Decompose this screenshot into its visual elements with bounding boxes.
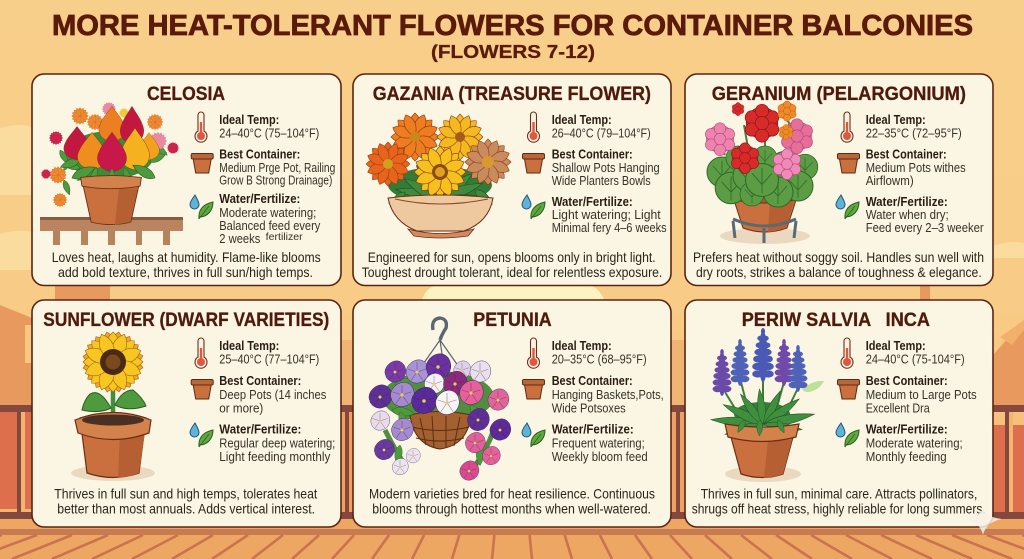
info: best container: [866, 148, 966, 188]
icon: pot: [838, 380, 860, 399]
description: [362, 249, 662, 280]
icon: water and leaf: [836, 195, 859, 219]
info: best container: [552, 148, 660, 188]
subtitle: (FLOWERS 7-12): [431, 42, 595, 62]
panel: gazania: [353, 74, 671, 286]
info: water and fertilize: Water/Fertilize:: [552, 195, 633, 209]
info: water and fertilize: Water when dry;: [866, 208, 949, 222]
description: [52, 249, 321, 280]
illustration: geranium on stand: [705, 101, 818, 244]
info: best container: Best Container:: [866, 374, 948, 388]
illustration: gazania in bowl: [359, 106, 518, 238]
description: Loves heat, laughs at humidity. Flame-like blooms: [52, 249, 321, 265]
info: best container: Shallow Pots Hanging: [552, 161, 660, 175]
info: ideal temp: 22–35°C (72–95°F): [866, 126, 962, 140]
info: ideal temp: Ideal Temp:: [552, 339, 612, 353]
description: Engineered for sun, opens blooms only in bright light.: [368, 249, 656, 265]
info: ideal temp: 24–40°C (75-104°F): [866, 352, 965, 366]
info: ideal temp: [552, 339, 647, 366]
icon: thermometer: [195, 112, 207, 142]
panel: geranium: [685, 74, 993, 286]
panel: salvia: [685, 300, 993, 527]
description: Thrives in full sun, minimal care. Attracts pollinators,: [701, 486, 977, 502]
icon: pot: [191, 380, 213, 399]
info: best container: or more): [219, 402, 263, 416]
info: water and fertilize: Light feeding monthly: [219, 450, 331, 464]
description: [369, 486, 655, 516]
icon: pot: [838, 154, 860, 173]
info: best container: Medium Pots withes: [866, 161, 966, 175]
info: water and fertilize: [552, 422, 648, 464]
info: ideal temp: Ideal Temp:: [219, 339, 279, 353]
icon: thermometer: [841, 112, 853, 142]
info: water and fertilize: 2 weeks: [219, 232, 260, 246]
icon: thermometer: [528, 112, 540, 142]
illustration: salvia in pot: [711, 328, 824, 482]
icon: thermometer: [195, 338, 207, 368]
description: [54, 486, 317, 516]
info: ideal temp: 26–40°C (79–104°F): [552, 126, 651, 140]
buildings: [0, 285, 1024, 406]
info: best container: Wide Potsoxes: [552, 402, 626, 416]
icon: water and leaf: [190, 423, 213, 447]
panel: celosia: [32, 74, 341, 286]
icon: thermometer: [841, 338, 853, 368]
sparkle: [966, 508, 1002, 535]
info: ideal temp: [219, 339, 319, 366]
info: ideal temp: Ideal Temp:: [866, 339, 926, 353]
info: water and fertilize: Moderate watering;: [866, 436, 963, 450]
heading: salvia: PERIW SALVIA INCA: [742, 310, 930, 331]
info: water and fertilize: Water/Fertilize:: [866, 422, 948, 436]
description: blooms through hottest months when well-watered.: [372, 500, 651, 516]
heading: petunia: PETUNIA: [473, 310, 552, 331]
description: [692, 486, 986, 516]
title: MORE HEAT-TOLERANT FLOWERS FOR CONTAINER BALCONIES: [52, 10, 973, 42]
info: water and fertilize: Light watering; Light: [552, 208, 661, 222]
info: best container: Medium to Large Pots: [866, 388, 977, 402]
info: water and fertilize: Feed every 2–3 weeker: [866, 221, 984, 235]
heading: celosia: CELOSIA: [147, 84, 225, 105]
info: ideal temp: [552, 113, 651, 140]
info: water and fertilize: [552, 195, 667, 235]
info: water and fertilize: Water/Fertilize:: [219, 192, 300, 206]
info: best container: Deep Pots (14 inches: [219, 388, 326, 402]
info: best container: Best Container:: [219, 148, 300, 162]
info: best container: [219, 374, 326, 416]
icon: pot: [522, 154, 544, 173]
description: add bold texture, thrives in full sun/high temps.: [58, 264, 313, 280]
info: water and fertilize: Moderate watering;: [219, 206, 316, 220]
info: best container: Best Container:: [219, 374, 301, 388]
info: water and fertilize: Water/Fertilize:: [866, 195, 948, 209]
info: water and fertilize: [866, 195, 984, 235]
description: Prefers heat without soggy soil. Handles sun well with: [693, 249, 984, 265]
heading: geranium: GERANIUM (PELARGONIUM): [712, 84, 966, 105]
info: ideal temp: [219, 113, 319, 140]
info: water and fertilize: Monthly feeding: [866, 450, 947, 464]
info: ideal temp: Ideal Temp:: [552, 113, 612, 127]
info: water and fertilize: Frequent watering;: [552, 436, 645, 450]
info: ideal temp: Ideal Temp:: [866, 113, 926, 127]
info: water and fertilize: fertilizer: [266, 232, 303, 243]
illustration: petunia hanging basket: [369, 318, 511, 480]
info: best container: Grow B Strong Drainage): [219, 174, 332, 188]
railing: [0, 405, 1024, 519]
info: ideal temp: 20–35°C (68–95°F): [552, 352, 647, 366]
clouds: [0, 125, 1024, 270]
info: ideal temp: Ideal Temp:: [219, 113, 279, 127]
description: [693, 249, 984, 280]
info: water and fertilize: Balanced feed every: [219, 219, 321, 233]
info: best container: [866, 374, 977, 416]
illustration: sunflower in pot: [66, 315, 160, 481]
illustration: celosia in pot on railing: [39, 100, 183, 245]
info: best container: Best Container:: [552, 148, 633, 162]
icon: pot: [191, 154, 213, 173]
info: ideal temp: [866, 113, 962, 140]
info: water and fertilize: [866, 422, 963, 464]
info: best container: Excellent Dra: [866, 402, 930, 416]
icon: water and leaf: [522, 423, 545, 447]
info: best container: Best Container:: [866, 148, 947, 162]
icon: pot: [522, 380, 544, 399]
info: water and fertilize: Water/Fertilize:: [219, 422, 301, 436]
description: Thrives in full sun and high temps, tolerates heat: [54, 486, 317, 502]
info: water and fertilize: Weekly bloom feed: [552, 450, 648, 464]
description: Toughest drought tolerant, ideal for relentless exposure.: [362, 264, 662, 280]
info: best container: [219, 148, 335, 188]
description: better than most annuals. Adds vertical interest.: [57, 500, 315, 516]
icon: water and leaf: [522, 195, 545, 219]
info: best container: Wide Planters Bowls: [552, 174, 651, 188]
panel: petunia: [353, 300, 671, 527]
icon: thermometer: [528, 338, 540, 368]
info: best container: Medium Prge Pot, Railing: [219, 161, 335, 175]
info: water and fertilize: Water/Fertilize:: [552, 422, 634, 436]
description: dry roots, strikes a balance of toughness & elegance.: [696, 264, 982, 280]
info: best container: Best Container:: [552, 374, 633, 388]
info: best container: Airflowm): [866, 174, 914, 188]
info: water and fertilize: [219, 422, 335, 464]
info: best container: Hanging Baskets,Pots,: [552, 388, 664, 402]
info: water and fertilize: [219, 192, 321, 246]
icon: water and leaf: [190, 195, 213, 219]
info: best container: [552, 374, 664, 416]
icon: water and leaf: [836, 423, 859, 447]
info: water and fertilize: Minimal fery 4–6 weeks: [552, 221, 667, 235]
heading: sunflower: SUNFLOWER (DWARF VARIETIES): [43, 310, 329, 331]
panel: sunflower: [32, 300, 341, 527]
info: ideal temp: 24–40°C (75–104°F): [219, 126, 319, 140]
heading: gazania: GAZANIA (TREASURE FLOWER): [373, 84, 651, 105]
sun glow: [422, 285, 604, 300]
description: Modern varieties bred for heat resilience. Continuous: [369, 486, 655, 502]
info: ideal temp: 25–40°C (77–104°F): [219, 352, 319, 366]
deck: [0, 519, 1024, 559]
info: ideal temp: [866, 339, 965, 366]
info: water and fertilize: Regular deep watering;: [219, 436, 335, 450]
